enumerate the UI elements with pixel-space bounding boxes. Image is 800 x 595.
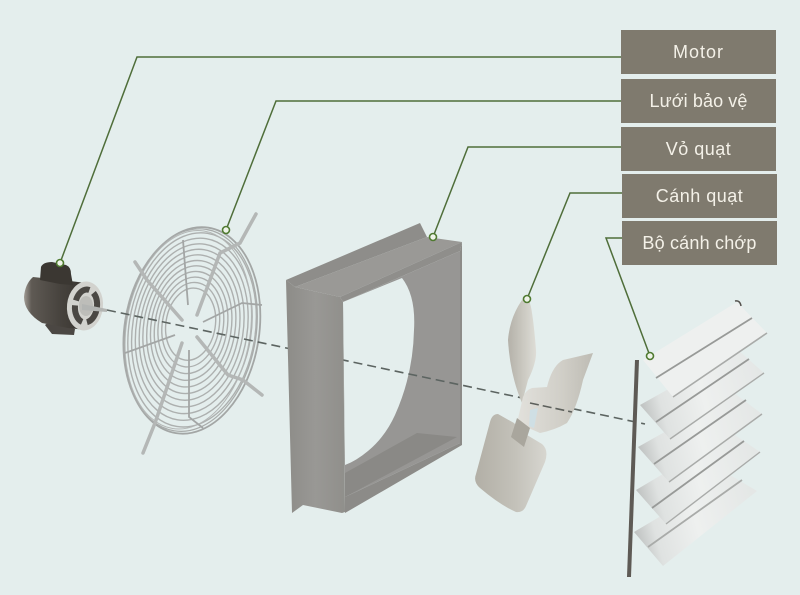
label: Vỏ quạt: [621, 127, 776, 171]
guard rings: [109, 217, 275, 444]
housing circular opening: [343, 278, 414, 465]
motor vents: [73, 288, 99, 324]
label: Motor: Motor: [673, 42, 724, 62]
louver slat 3: [638, 393, 762, 482]
label: Cánh quạt: [622, 174, 777, 218]
dashed centre axis: [107, 310, 645, 424]
motor base: [45, 321, 75, 335]
motor body: [24, 277, 86, 330]
hub highlight: [529, 408, 538, 428]
label: Bộ cánh chớp: Bộ cánh chớp: [642, 233, 757, 253]
fan guard: [109, 214, 275, 453]
louver slat 5: [634, 475, 757, 566]
motor: [24, 262, 107, 335]
blade root: [511, 418, 530, 447]
guard mounting arms: [135, 214, 262, 453]
motor shaft: [82, 304, 107, 312]
label: Motor: [621, 30, 776, 74]
marker dots: [56, 226, 654, 360]
guard thin spokes: [125, 240, 262, 428]
louver slat 4: [636, 433, 760, 524]
louver rod: [627, 360, 639, 577]
louver slat 1: [643, 301, 767, 397]
axis over right blade: [530, 403, 572, 412]
upper blade: [508, 296, 536, 403]
right blade: [517, 353, 593, 433]
leader: blade: [527, 193, 622, 299]
housing top face: [295, 237, 462, 297]
label: Vỏ quạt: Vỏ quạt: [666, 139, 731, 159]
motor end cap: [65, 280, 105, 332]
motor capacitor housing: [40, 262, 73, 285]
fan blades: [475, 296, 593, 512]
leader: guard: [226, 101, 621, 230]
housing front left face: [286, 280, 345, 513]
label: Lưới bảo vệ: Lưới bảo vệ: [649, 91, 748, 111]
label: Lưới bảo vệ: [621, 79, 776, 123]
housing rear flange: [286, 223, 427, 287]
louver set: [627, 301, 767, 577]
housing inner walls: [343, 251, 460, 497]
label: Bộ cánh chớp: [622, 221, 777, 265]
leader: louver: [606, 238, 650, 356]
leader: motor: [60, 57, 621, 263]
label: Cánh quạt: Cánh quạt: [656, 186, 743, 206]
leader: housing: [433, 147, 621, 237]
housing lower and right edge: [345, 242, 462, 513]
fan housing front: [286, 242, 462, 513]
lower blade: [475, 414, 546, 512]
housing front rim: [340, 242, 462, 302]
louver slat 2: [640, 350, 764, 439]
fan housing interior: [286, 223, 462, 497]
housing inner bottom wall: [345, 433, 457, 497]
leader lines: [60, 57, 650, 356]
